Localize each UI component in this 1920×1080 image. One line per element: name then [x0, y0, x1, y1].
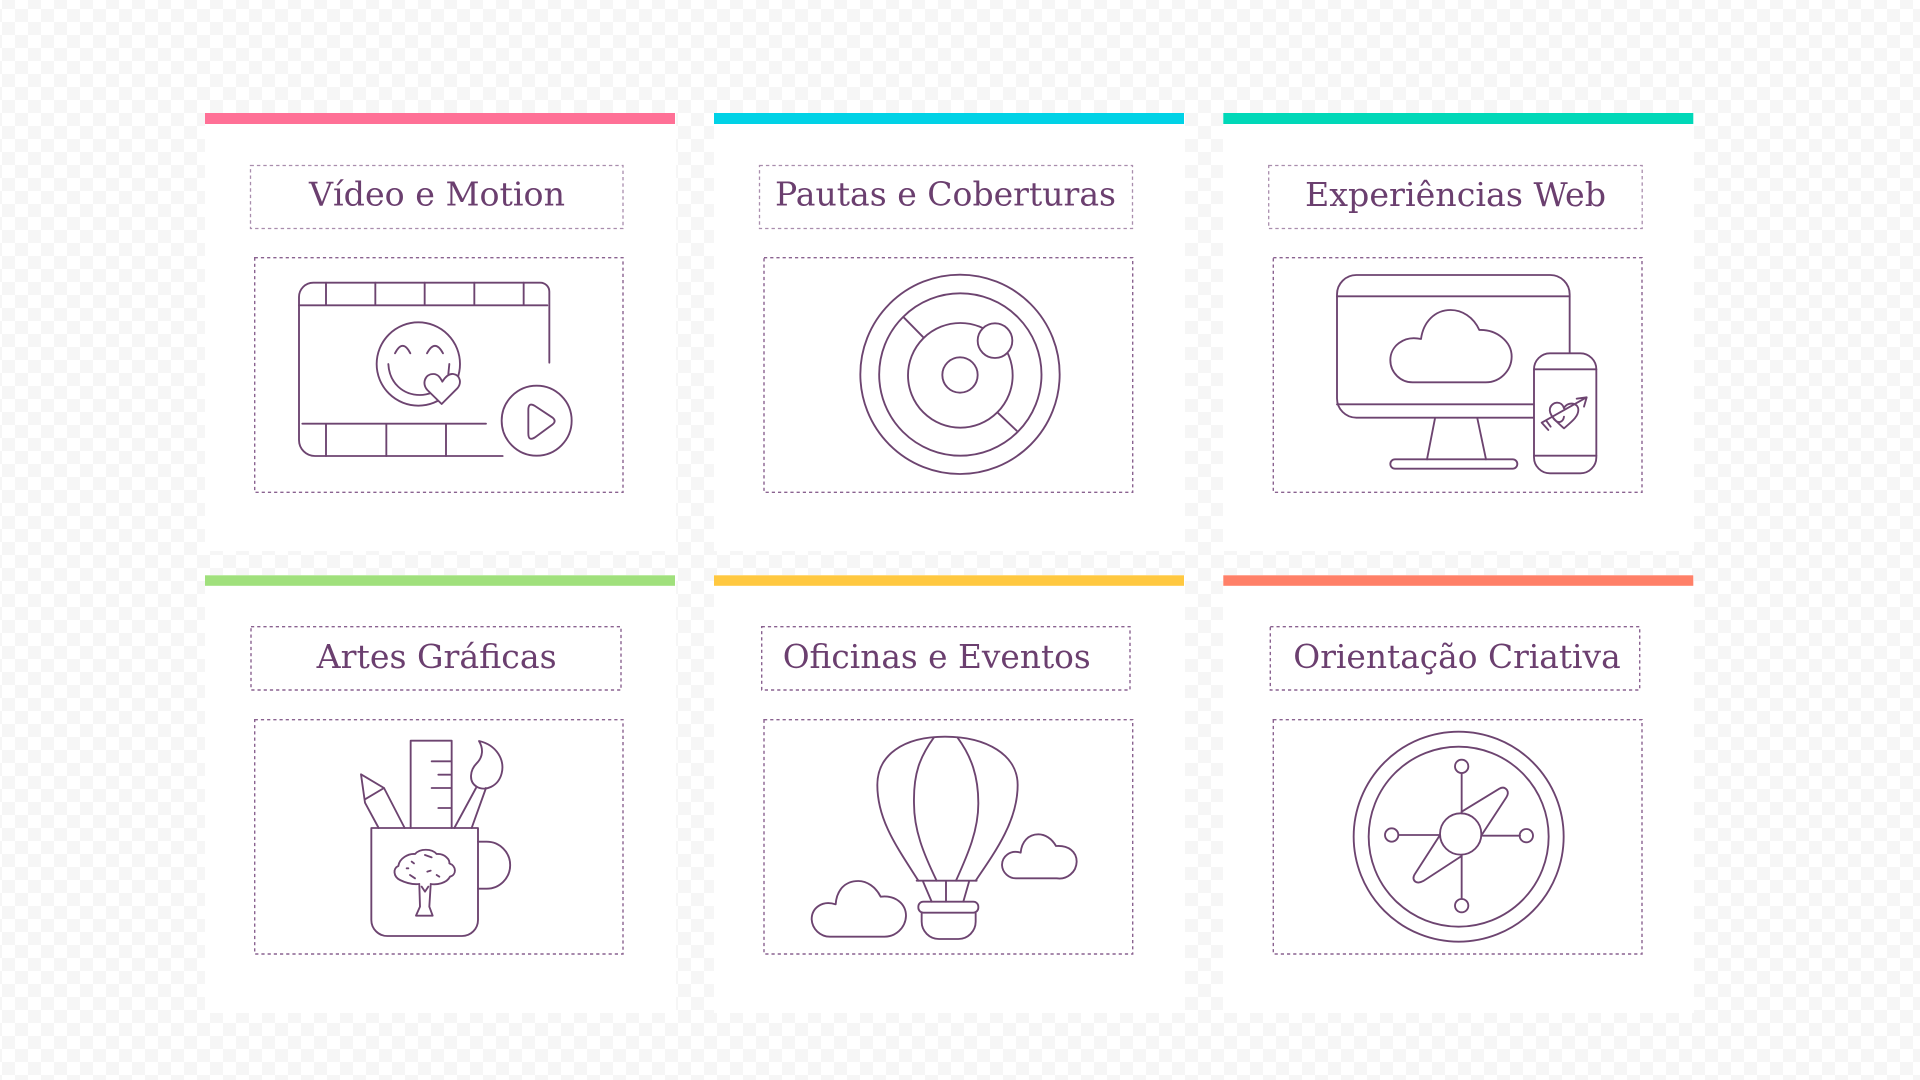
colour bar: teal: [1223, 113, 1693, 124]
colour bar: coral: [1223, 575, 1693, 586]
icon box: mug with pencil, ruler and brush: [255, 720, 623, 954]
heading box: Oficinas e Eventos: Oficinas e Eventos: [783, 637, 1091, 676]
heading box: Pautas e Coberturas: [760, 166, 1132, 228]
panel: Pautas e Coberturas: [714, 113, 1185, 551]
heading box: Orientação Criativa: Orientação Criativa: [1293, 637, 1621, 676]
heading box: Pautas e Coberturas: Pautas e Coberturas: [775, 174, 1116, 214]
icon box: concentric radar circles: [764, 258, 1133, 492]
icon box: hot-air balloon and clouds: [764, 720, 1133, 954]
heading box: Experiências Web: [1269, 166, 1642, 228]
heading box: Orientação Criativa: [1270, 627, 1640, 690]
heading box: Artes Gráficas: Artes Gráficas: [316, 637, 557, 676]
heading box: Vídeo e Motion: [250, 166, 623, 228]
colour bar: cyan: [714, 113, 1184, 124]
heading box: Vídeo e Motion: Vídeo e Motion: [308, 174, 565, 214]
panel: Experiências Web: [1223, 113, 1694, 551]
heading box: Oficinas e Eventos: [762, 627, 1130, 690]
heading box: Experiências Web: Experiências Web: [1305, 175, 1606, 214]
colour bar: green: [205, 575, 675, 586]
panel: Artes Gráficas: [205, 575, 676, 1013]
icon box: compass: [1273, 720, 1642, 954]
icon box: film with smiley and play button: [255, 258, 623, 492]
heading box: Artes Gráficas: [251, 627, 621, 690]
panel: Orientação Criativa: [1223, 575, 1694, 1013]
colour bar: yellow: [714, 575, 1184, 586]
panel: Vídeo e Motion: [205, 113, 676, 551]
icon box: monitor and phone: [1273, 258, 1642, 492]
panel: Oficinas e Eventos: [714, 575, 1185, 1013]
colour bar: pink: [205, 113, 675, 124]
